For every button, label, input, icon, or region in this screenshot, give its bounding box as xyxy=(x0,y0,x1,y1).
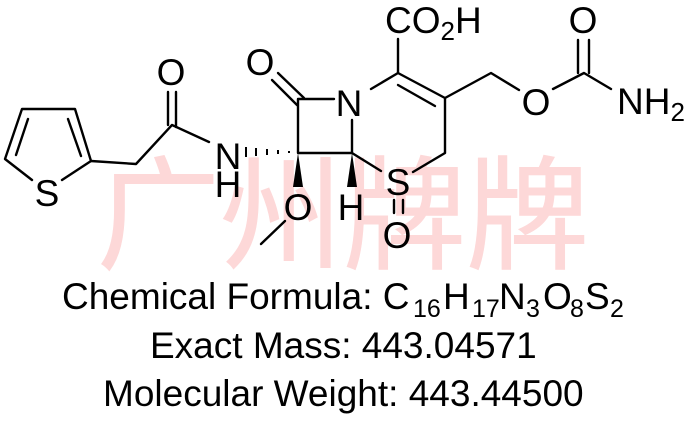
beta-lactam ring xyxy=(272,73,352,153)
chemical formula line: 8 xyxy=(570,295,584,323)
hashed stereo bond xyxy=(246,147,289,157)
chemical formula line: S xyxy=(585,276,610,317)
carboxylic acid label: CO xyxy=(385,0,440,41)
hydrogen label: H xyxy=(338,187,364,228)
chemical formula line: O xyxy=(543,276,572,317)
sulfoxide oxygen label: O xyxy=(383,215,411,256)
carbamate chain xyxy=(445,40,611,98)
amine label: NH xyxy=(617,81,670,122)
carboxylic acid label: 2 xyxy=(440,16,455,46)
chemical formula line: H xyxy=(443,276,470,317)
sulfoxide sulfur label: S xyxy=(386,162,410,203)
chemical formula line: N xyxy=(499,276,526,317)
amide NH label: H xyxy=(215,164,241,205)
chemical formula line: Chemical Formula: C xyxy=(62,276,409,317)
sulfoxide double bond xyxy=(394,200,403,213)
amide NH label xyxy=(215,136,241,205)
chemical formula line: 3 xyxy=(526,295,540,323)
amine label: 2 xyxy=(670,97,685,127)
exact mass line: Exact Mass: 443.04571 xyxy=(150,325,537,366)
chemical formula line: 2 xyxy=(610,295,624,323)
watermark: 广州牌牌 xyxy=(97,149,589,286)
hydrogen wedge bond xyxy=(347,153,357,187)
methoxy oxygen label: O xyxy=(284,187,312,228)
lactam oxygen label: O xyxy=(246,42,274,83)
carbonyl oxygen label: O xyxy=(569,0,597,41)
carboxylic acid label: H xyxy=(455,0,482,41)
molecular weight line: Molecular Weight: 443.44500 xyxy=(103,373,584,414)
ester oxygen label: O xyxy=(522,82,550,123)
chemical formula line: 16 xyxy=(413,295,441,323)
chemical formula line: 17 xyxy=(472,295,500,323)
thiophene sulfur label: S xyxy=(35,173,59,214)
amide NH label: N xyxy=(215,136,241,177)
ring nitrogen label: N xyxy=(336,83,362,124)
carboxyl bond xyxy=(397,39,399,73)
amide oxygen label: O xyxy=(157,52,185,93)
thiophene ring xyxy=(5,109,91,180)
methoxy methyl bond xyxy=(261,221,285,244)
molecule structure xyxy=(5,0,685,256)
methoxy wedge bond xyxy=(293,153,303,187)
acetamide linker xyxy=(91,92,209,164)
dihydrothiazine ring xyxy=(352,73,445,172)
